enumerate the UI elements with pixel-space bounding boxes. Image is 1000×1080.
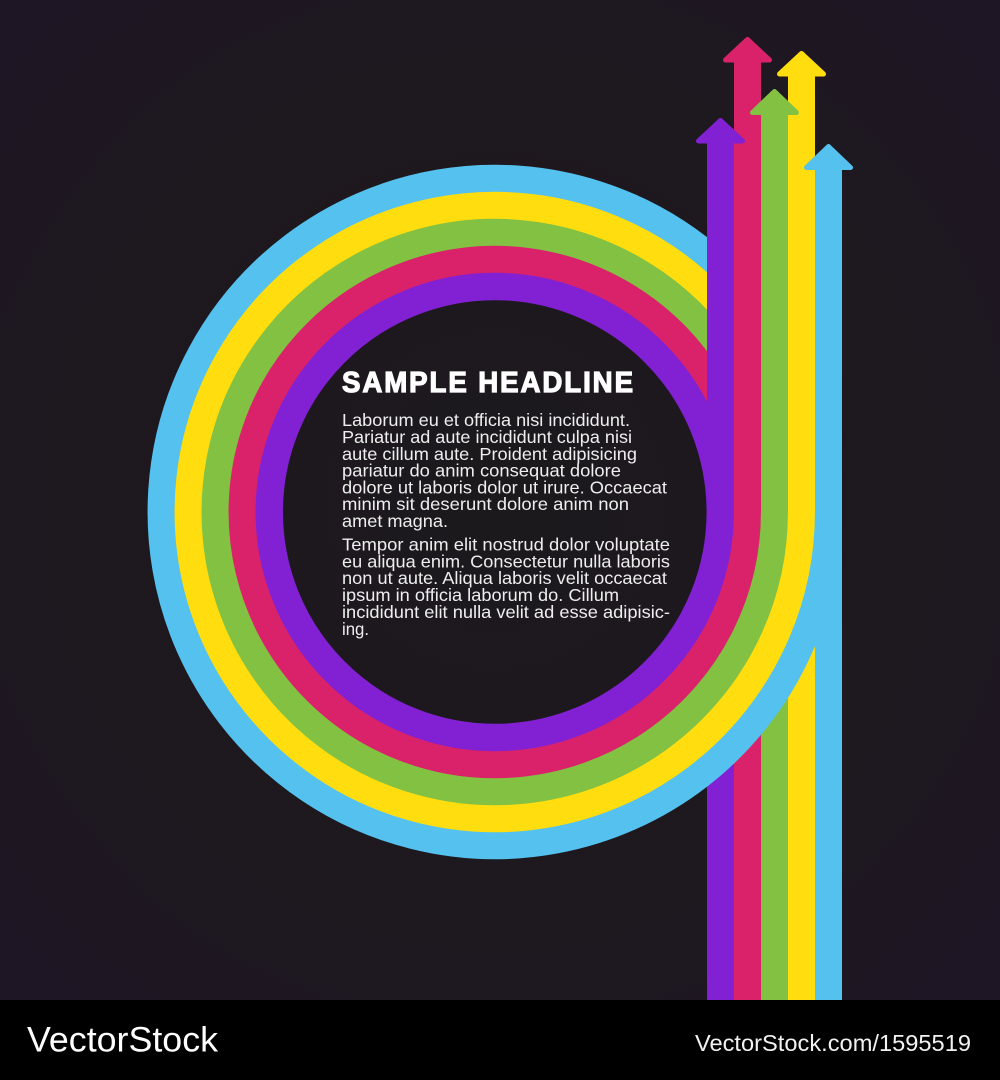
paragraph two: ing. (342, 619, 369, 639)
arrow: green (752, 92, 796, 512)
paragraph one: minim sit deserunt dolore anim non (342, 494, 629, 514)
paragraph one: pariatur do anim consequat dolore (342, 460, 621, 480)
paragraph two: incididunt elit nulla velit ad esse adipisic- (342, 602, 670, 622)
headline: SAMPLE HEADLINE (342, 367, 633, 398)
lower vertical stripes (707, 512, 842, 1000)
watermark image id: VectorStock.com/1595519 (695, 1030, 971, 1056)
watermark logo text: VectorStock (27, 1020, 218, 1060)
paragraph two: ipsum in officia laborum do. Cillum (342, 585, 619, 605)
paragraph one: aute cillum aute. Proident adipisicing (342, 444, 637, 464)
paragraph one (342, 410, 667, 531)
paragraph one: amet magna. (342, 511, 448, 531)
arrow: yellow (780, 54, 824, 512)
concentric rainbow rings (161, 178, 828, 845)
paragraph two: eu aliqua enim. Consectetur nulla laboris (342, 552, 670, 572)
arrow: purple (698, 120, 742, 512)
arrow: blue (806, 146, 850, 512)
paragraph one: Laborum eu et officia nisi incididunt. (342, 410, 630, 430)
watermark bar (0, 1000, 1000, 1080)
paragraph one: Pariatur ad aute incididunt culpa nisi (342, 427, 632, 447)
arrow: pink (726, 40, 770, 512)
paragraph two (342, 534, 670, 639)
paragraph two: non ut aute. Aliqua laboris velit occaecat (342, 568, 667, 588)
paragraph one: dolore ut laboris dolor ut irure. Occaecat (342, 478, 667, 498)
paragraph two: Tempor anim elit nostrud dolor voluptate (342, 534, 670, 554)
